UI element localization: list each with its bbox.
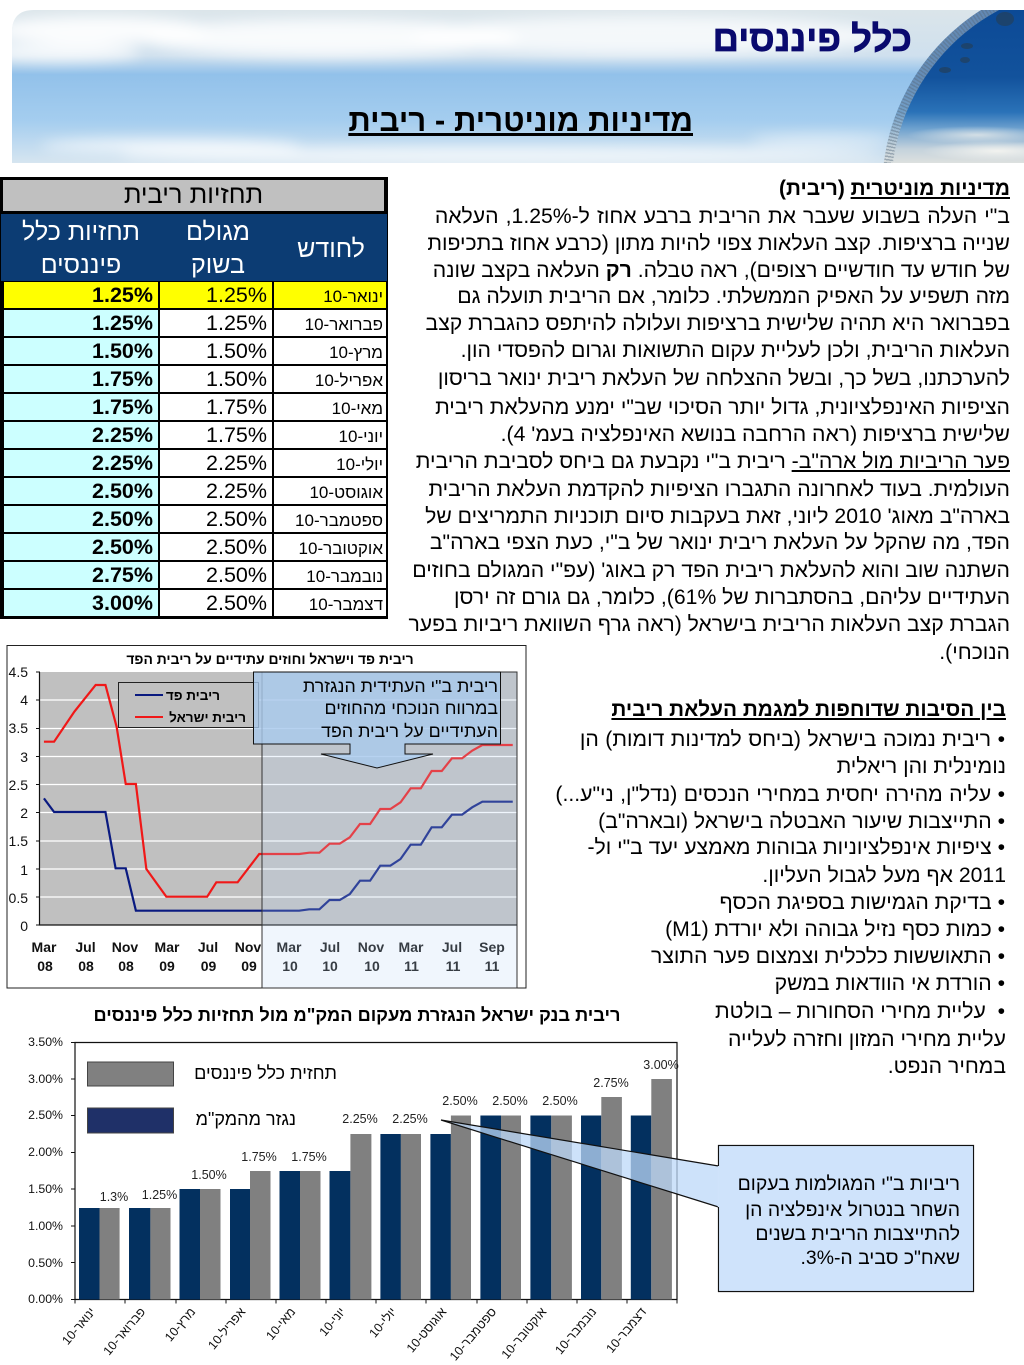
x axis labels: אפריל-10 — [205, 1305, 248, 1352]
y axis labels: 0.5 — [9, 890, 28, 906]
table rows: 3.00% — [92, 591, 153, 615]
text block: monetary policy analysis: הגברת קצב העלאות הריבית בישראל (ראה גרף השוואת ריביות בפער — [408, 613, 1010, 636]
x axis labels: אוקטובר-10 — [499, 1305, 549, 1362]
x axis labels: 11 — [404, 958, 419, 974]
table rows: 1.75% — [92, 395, 153, 419]
callout: implied future rate — [254, 672, 500, 768]
data labels: 2.25% — [392, 1112, 428, 1126]
text block: monetary policy analysis: בארה"ב מאוג' 2010 ליוני, זאת בעקבות סיום תוכניות התמריצים של — [425, 505, 1010, 528]
table rows: 2.50% — [92, 535, 153, 559]
x axis labels: Mar — [155, 939, 180, 955]
table rows: 1.25% — [92, 283, 153, 307]
callout: priced-in rates — [441, 1120, 974, 1292]
table rows: 2.25% — [92, 423, 153, 447]
bars: Clal Finance forecast — [100, 1079, 672, 1300]
x axis labels: 11 — [485, 958, 500, 974]
data labels: 1.25% — [142, 1188, 177, 1202]
table rows: 2.25% — [92, 451, 153, 475]
text block: monetary policy analysis: פער הריביות מול ארה"ב- ריבית ב"י נקבעת גם ביחס לסביבת הריבית — [416, 450, 1010, 473]
table rows: פברואר-10 — [305, 315, 383, 334]
text block: monetary policy analysis: הפד, מה שהקל על העלאת ריבית ינואר של ב"י, כעת הצפי בארה"ב — [430, 531, 1010, 554]
page title: מדיניות מוניטרית - ריבית — [348, 103, 693, 138]
table rows: 1.50% — [92, 339, 153, 363]
table rows: דצמבר-10 — [309, 595, 383, 614]
x axis labels: 08 — [78, 958, 94, 974]
x axis labels: Jul — [320, 939, 340, 955]
callout: priced-in rates: שאח"כ סביב ה-3%. — [801, 1247, 960, 1269]
axis ticks — [71, 1042, 677, 1304]
y axis labels: 0.50% — [28, 1256, 63, 1270]
table rows: 2.75% — [92, 563, 153, 587]
text block: monetary policy analysis: הנוכחי). — [939, 641, 1010, 664]
x axis labels: 10 — [282, 958, 298, 974]
table rows: 1.75% — [92, 367, 153, 391]
text block: monetary policy analysis — [408, 177, 1010, 664]
text block: monetary policy analysis: בפברואר היא תהיה שלישית ברציפות ועלולה להיתפס כהגברת קצב — [426, 312, 1010, 335]
x axis labels: יוני-10 — [317, 1305, 348, 1339]
y axis labels — [9, 664, 28, 934]
y axis labels: 4.5 — [9, 664, 28, 680]
x axis labels: 09 — [241, 958, 257, 974]
text block: monetary policy analysis: של חודש עד חודשיים רצופים), ראה טבלה. רק העלאה בקצב שונה — [433, 259, 1010, 282]
text block: monetary policy analysis: העולמית. בעוד לאחרונה התגברו הציפיות להקדמת העלאת הריבית — [428, 478, 1010, 501]
table rows: 2.50% — [92, 479, 153, 503]
data labels: 2.75% — [593, 1076, 629, 1090]
callout: implied future rate: במרווח הנוכחי מהחוזים — [324, 698, 498, 718]
data labels: 3.00% — [643, 1058, 679, 1072]
icon: globe — [884, 10, 1024, 163]
y axis labels: 1.50% — [28, 1182, 63, 1196]
text block: monetary policy analysis: מדיניות מוניטרית (ריבית) — [779, 177, 1010, 200]
text block: reasons for slowing rate increases: • התאוששות כלכלית וצמצום פער התוצר — [651, 945, 1005, 968]
x axis labels: ינואר-10 — [59, 1305, 98, 1348]
y axis labels: 0.00% — [28, 1292, 63, 1306]
table column headers: תחזיות כלל — [22, 218, 140, 246]
legend — [118, 682, 258, 728]
x axis labels: Nov — [235, 939, 261, 955]
x axis labels: Mar — [32, 939, 57, 955]
x axis labels: Jul — [198, 939, 218, 955]
y axis labels: 3.50% — [28, 1035, 63, 1049]
x axis labels: 09 — [159, 958, 175, 974]
x axis labels: יולי-10 — [366, 1305, 399, 1340]
table rows: 2.50% — [206, 591, 267, 615]
table rows: אוקטובר-10 — [299, 539, 383, 558]
x axis labels: 10 — [364, 958, 380, 974]
callout: priced-in rates: להתייצבות הריבית בשנים — [755, 1223, 960, 1245]
text block: reasons for slowing rate increases: • ציפיות אינפלציוניות גבוהות מאמצע יעד ב"י ול- — [587, 836, 1005, 859]
table rows: 1.25% — [92, 311, 153, 335]
table title — [3, 180, 384, 211]
table rows: 2.50% — [206, 535, 267, 559]
line: Israel rate — [44, 685, 513, 897]
table rows: 2.50% — [206, 507, 267, 531]
table rows: 1.25% — [206, 283, 267, 307]
company title: כלל פיננסים — [713, 18, 912, 59]
y axis labels: 1.00% — [28, 1219, 63, 1233]
panel: rate forecast table — [0, 177, 388, 619]
y axis labels: 3 — [20, 749, 28, 765]
table column headers: בשוק — [191, 251, 245, 279]
table rows: 1.25% — [206, 311, 267, 335]
table rows: יולי-10 — [336, 455, 383, 474]
text block: reasons for slowing rate increases: עליית מחירי המזון וחזרה לעלייה — [728, 1028, 1006, 1051]
x axis labels: Jul — [442, 939, 462, 955]
x axis labels: 10 — [322, 958, 338, 974]
text block: monetary policy analysis: הציפיות האינפלציונית, גדול יותר הסיכוי שב"י ימנע מהעלאת ריבית — [435, 396, 1010, 419]
x axis labels: Mar — [277, 939, 302, 955]
y axis labels: 4 — [20, 692, 28, 708]
text block: reasons for slowing rate increases: • כמות כסף נזיל גבוהה ולא יורדת (M1) — [665, 918, 1005, 941]
callout: priced-in rates: ריביות ב"י המגולמות בעקום — [738, 1173, 960, 1195]
table column headers: פיננסים — [41, 251, 121, 279]
chart: BoI rate vs forecast — [28, 1005, 974, 1363]
text block: reasons for slowing rate increases: נומינלית והן ריאלית — [837, 755, 1006, 778]
text block: reasons for slowing rate increases: במחיר הנפט. — [888, 1055, 1006, 1078]
highlight: futures period — [262, 672, 517, 988]
x axis labels — [59, 1305, 649, 1363]
x axis labels: ספטמבר-10 — [447, 1305, 499, 1363]
data labels: 2.50% — [492, 1094, 528, 1108]
y axis labels: 1 — [20, 862, 28, 878]
table rows: 2.50% — [92, 507, 153, 531]
chart title: ריבית פד וישראל וחוזים עתידיים על ריבית הפד — [126, 651, 414, 667]
x axis labels: 09 — [201, 958, 216, 974]
x axis labels: נובמבר-10 — [552, 1305, 599, 1357]
text block: reasons for slowing rate increases: • עליית מחירי הסחורות – בולטת — [715, 1000, 1005, 1023]
text block: monetary policy analysis: העתידיים עליהם, בהסתברות של 61%), כלומר, גם גורם זה ירסן — [454, 586, 1010, 609]
header banner — [12, 10, 1024, 163]
x axis labels: Sep — [479, 939, 505, 955]
data labels: 2.50% — [542, 1094, 578, 1108]
text block: monetary policy analysis: שנייה ברציפות. קצב העלאות צפוי להיות מתון (כרבע אחוז בתכיפות — [427, 232, 1010, 255]
data labels: 2.50% — [442, 1094, 478, 1108]
x axis labels: מרץ-10 — [162, 1305, 198, 1344]
y axis labels: 3.5 — [9, 720, 28, 736]
text block: reasons for slowing rate increases: 2011 אף מעל לגבול העליון. — [762, 864, 1006, 887]
table rows — [4, 282, 386, 616]
table column headers: לחודש — [297, 235, 365, 263]
text block: reasons for slowing rate increases — [555, 698, 1006, 1078]
table rows: ספטמבר-10 — [295, 511, 383, 530]
legend: ריבית ישראל — [169, 710, 246, 725]
x axis labels: אוגוסט-10 — [404, 1305, 449, 1355]
text block: monetary policy analysis: שלישית ברציפות (ראה הרחבה בנושא האינפלציה בעמ' 4). — [501, 423, 1010, 446]
data labels: 1.75% — [241, 1150, 277, 1164]
y axis labels: 1.5 — [9, 833, 28, 849]
text block: reasons for slowing rate increases: • ריבית נמוכה בישראל (ביחס למדינות דומות) הן — [580, 728, 1005, 751]
callout: implied future rate: העתידיים על ריבית הפד — [321, 721, 498, 741]
table rows: יוני-10 — [339, 427, 383, 446]
table rows: 1.75% — [206, 423, 267, 447]
x axis labels: Nov — [112, 939, 138, 955]
table column headers: מגולם — [186, 218, 250, 246]
y axis labels: 2.5 — [9, 777, 28, 793]
table rows: מרץ-10 — [329, 343, 383, 362]
table rows: אוגוסט-10 — [309, 483, 383, 502]
bars: implied by T-bills — [79, 1116, 651, 1300]
x axis labels: 11 — [446, 958, 461, 974]
text block: reasons for slowing rate increases: • הורדת אי הוודאות במשק — [775, 972, 1005, 995]
x axis labels: דצמבר-10 — [604, 1305, 649, 1356]
x axis labels: 08 — [37, 958, 53, 974]
data labels: 1.75% — [291, 1150, 327, 1164]
legend — [88, 1062, 337, 1133]
text block: reasons for slowing rate increases: • עליה מהירה יחסית במחירי הנכסים (נדל"ן, ני"ע...) — [555, 783, 1005, 806]
callout: priced-in rates: השחר בנטרול אינפלציה הן — [745, 1199, 960, 1221]
y axis labels — [28, 1035, 63, 1306]
table rows: 1.75% — [206, 395, 267, 419]
chart: Fed and Israel rates with futures — [6, 645, 526, 988]
text block: monetary policy analysis: ב"י העלה בשבוע שעבר את הריבית ברבע אחוז ל-1.25%, העלאה — [435, 205, 1010, 228]
text block: monetary policy analysis: העלאות הריבית, ולכן לעליית עקום התשואות וגרום להפסדי הון. — [461, 339, 1010, 362]
table rows: 1.50% — [206, 339, 267, 363]
data labels: 1.3% — [100, 1190, 128, 1204]
table rows: מאי-10 — [332, 399, 383, 418]
data labels: 2.25% — [342, 1112, 378, 1126]
table rows: 2.25% — [206, 479, 267, 503]
table column headers — [1, 214, 387, 281]
line: Fed rate — [44, 798, 513, 911]
x axis labels: פברואר-10 — [101, 1305, 148, 1358]
y axis labels: 3.00% — [28, 1072, 63, 1086]
table rows: אפריל-10 — [315, 371, 383, 390]
x axis labels: 08 — [118, 958, 134, 974]
data labels: 1.50% — [191, 1168, 227, 1182]
heading: reasons: בין הסיבות שדוחפות למגמת העלאת ריבית — [611, 698, 1006, 721]
x axis labels: Nov — [358, 939, 384, 955]
text block: reasons for slowing rate increases: • התייצבות שיעור האבטלה בישראל (ובארה"ב) — [598, 810, 1005, 833]
y axis labels: 2 — [20, 805, 28, 821]
callout: implied future rate: ריבית ב"י העתידית הנגזרת — [303, 676, 498, 696]
plot area — [36, 672, 517, 925]
x axis labels: Mar — [399, 939, 424, 955]
table rows: נובמבר-10 — [306, 567, 383, 586]
legend: ריבית פד — [166, 688, 220, 703]
text block: reasons for slowing rate increases: • בדיקת הגמישות בספיגת הכסף — [720, 891, 1005, 914]
x axis labels: מאי-10 — [263, 1305, 298, 1343]
x axis labels: Jul — [75, 939, 96, 955]
table rows: ינואר-10 — [323, 287, 383, 306]
y axis labels: 2.00% — [28, 1145, 63, 1159]
x axis labels — [32, 939, 505, 974]
table rows: 2.50% — [206, 563, 267, 587]
table rows: 2.25% — [206, 451, 267, 475]
chart title: ריבית בנק ישראל הנגזרת מעקום המק"מ מול תחזיות כלל פיננסים — [93, 1005, 621, 1025]
legend: תחזית כלל פיננסים — [194, 1063, 337, 1083]
table title: תחזיות ריבית — [124, 181, 263, 209]
legend: נגזר מהמק"מ — [196, 1109, 296, 1129]
y axis labels: 2.50% — [28, 1108, 63, 1122]
table rows: 1.50% — [206, 367, 267, 391]
plot frame — [75, 1042, 677, 1300]
text block: monetary policy analysis: להערכתנו, בשל כך, ובשל ההצלחה של העלאת ריבית ינואר בריסון — [438, 367, 1010, 390]
data labels — [100, 1058, 679, 1204]
text block: monetary policy analysis: השתנה שוב והוא להעלאת ריבית הפד רק באוג' (עפ"י המגולם בחוזים — [412, 559, 1010, 582]
text block: monetary policy analysis: מזה תשפיע על האפיק הממשלתי. כלומר, אם הריבית תועלה גם — [457, 285, 1010, 308]
y axis labels: 0 — [20, 918, 28, 934]
